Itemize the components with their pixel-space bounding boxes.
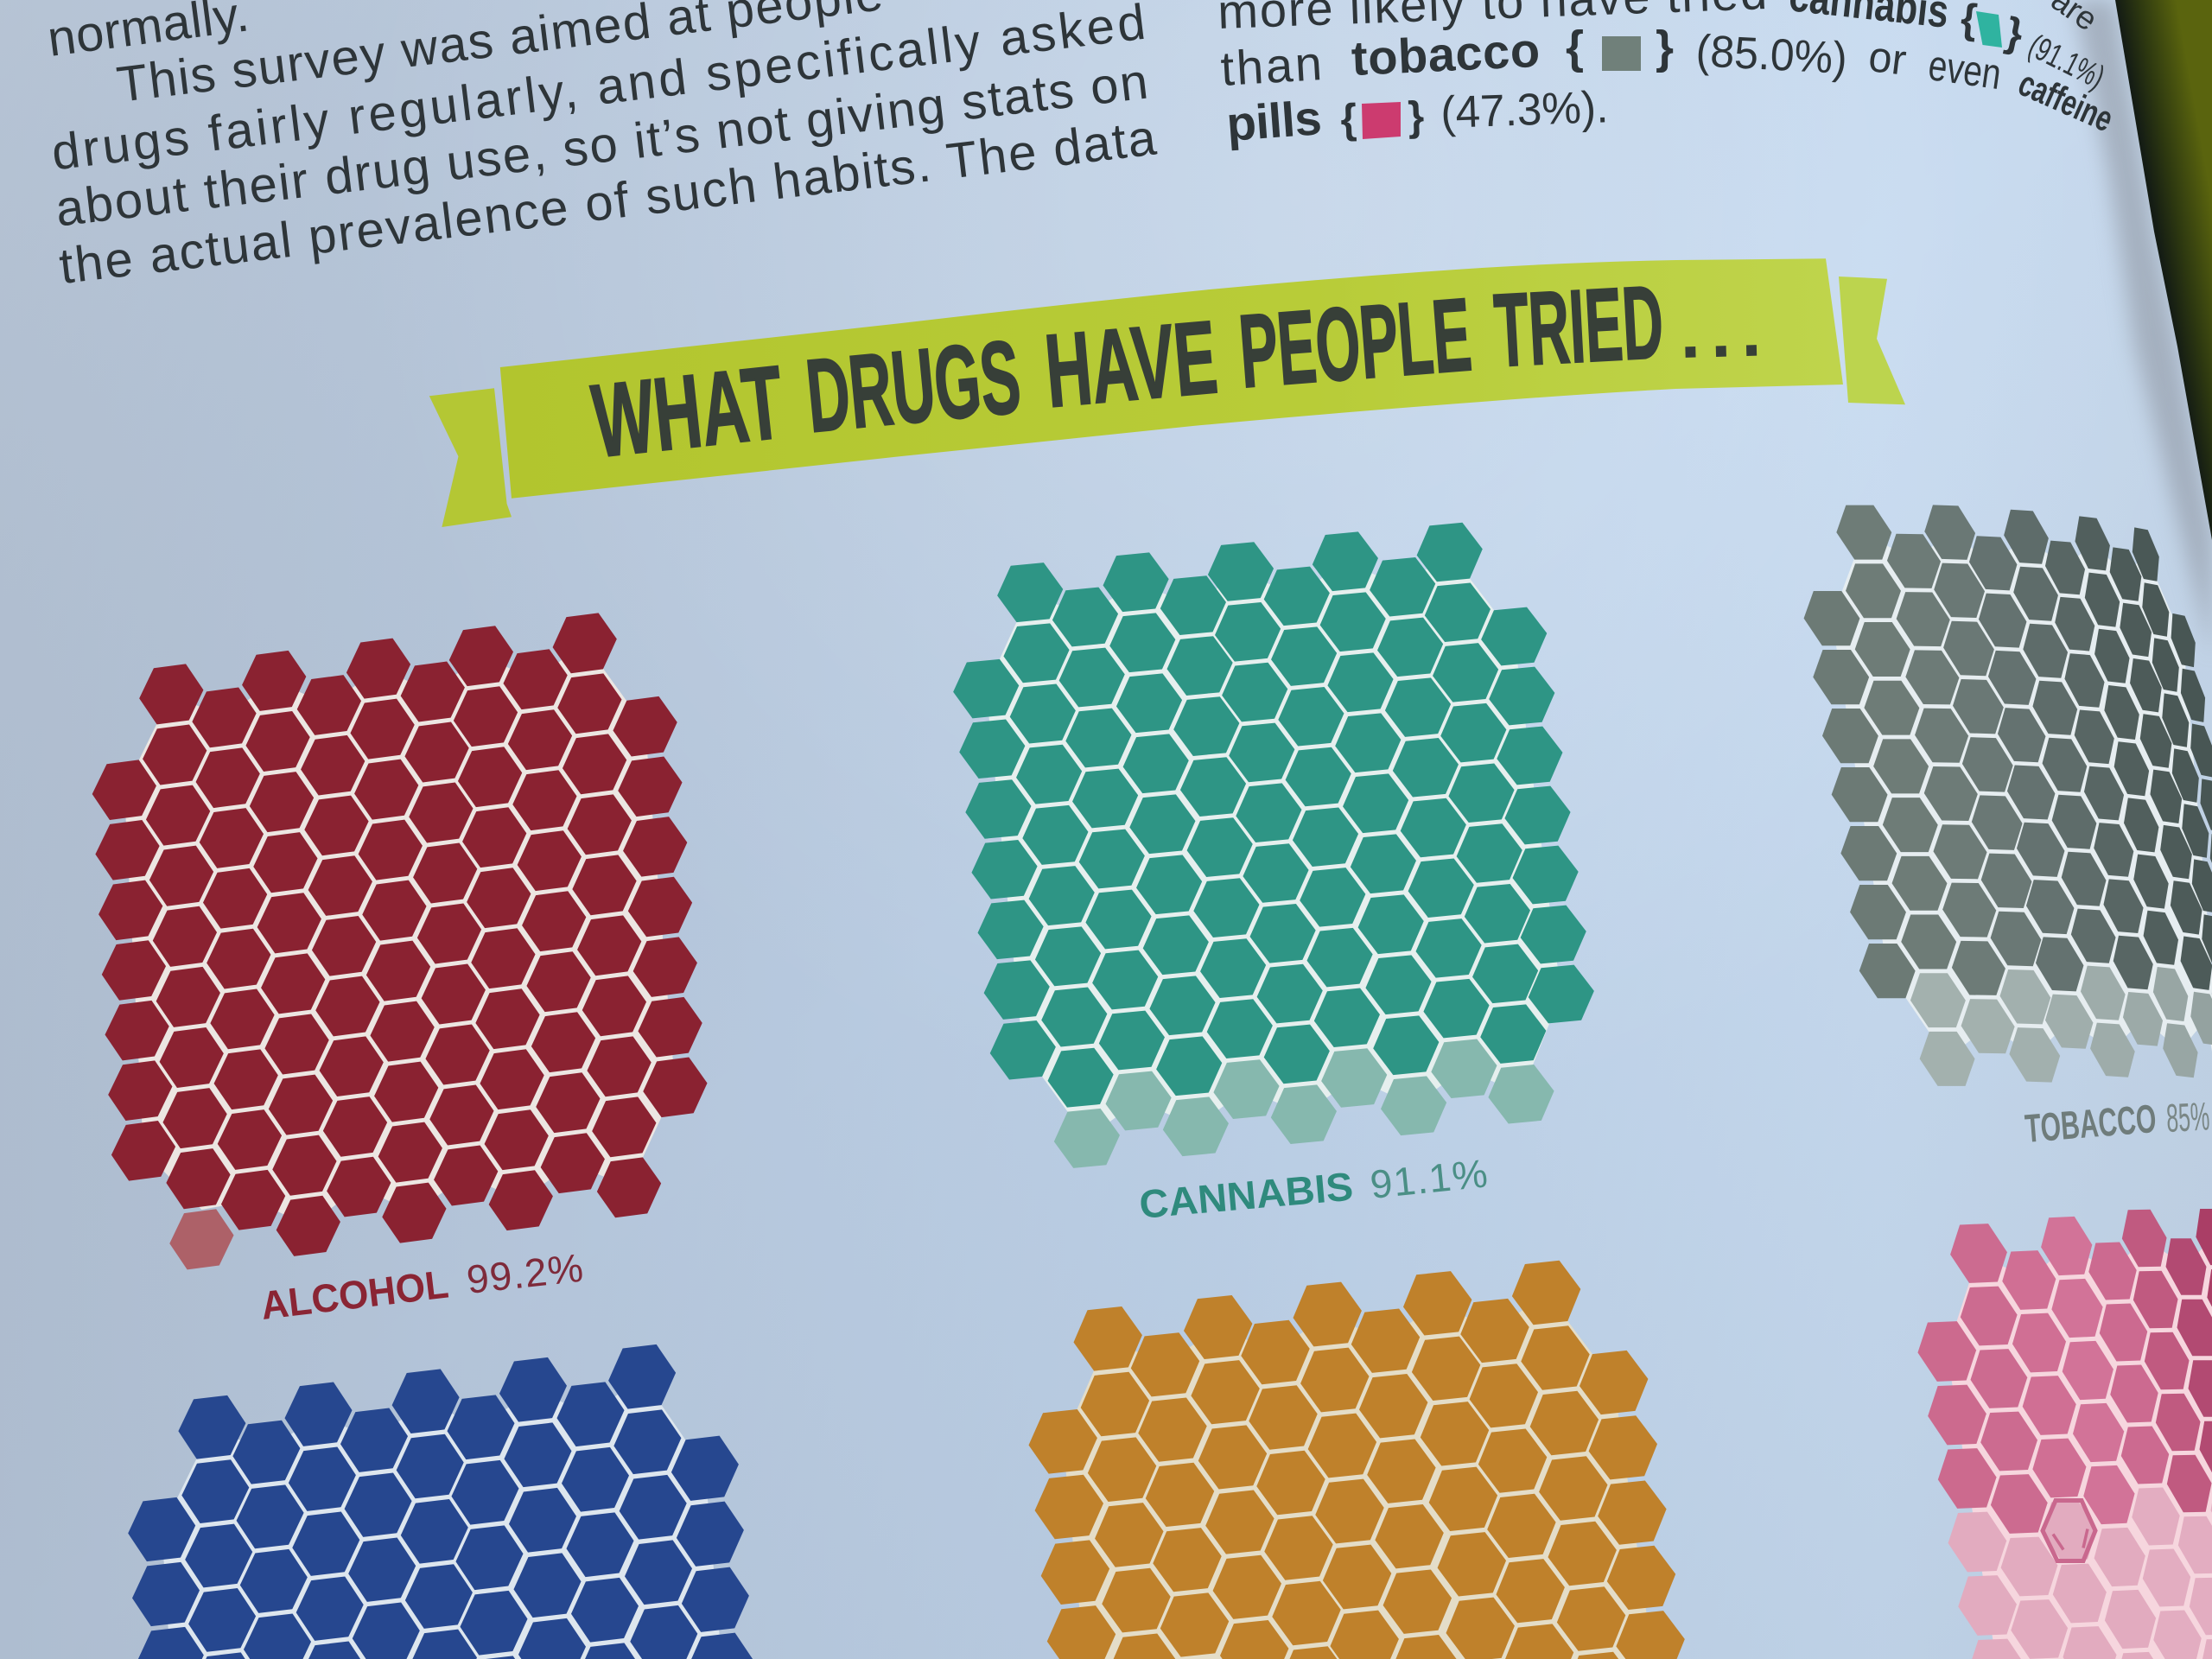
page edge shadow and book cover	[2074, 0, 2212, 657]
text block: right column findings: even	[1925, 41, 2004, 99]
label: alcohol	[258, 1245, 585, 1328]
text block: right column findings: or	[1866, 32, 1909, 85]
text block: right column findings: {	[1340, 96, 1357, 143]
hex chart: tobacco 85%	[1800, 505, 2212, 1086]
text block: right column findings: (85.0%)	[1694, 26, 1848, 84]
panel: tobacco	[1800, 505, 2212, 1151]
text block: left column intro: the actual prevalence of such habits. The data	[56, 109, 1160, 295]
banner title: DRUGS	[802, 319, 1025, 454]
banner ribbon	[500, 258, 1843, 499]
panel: orange drug chart	[1026, 1259, 1689, 1659]
banner title: ...	[1679, 290, 1762, 373]
label: alcohol: ALCOHOL	[258, 1261, 451, 1328]
label: cannabis	[1137, 1150, 1490, 1227]
text block: right column findings: pills	[1224, 90, 1324, 151]
panel: caffeine pills	[1913, 1209, 2212, 1659]
text block: right column findings	[1217, 0, 2120, 151]
hex chart: cannabis 91.1%	[950, 521, 1598, 1170]
text block: right column findings: caffeine	[2012, 62, 2120, 139]
banner title: WHAT	[588, 344, 789, 480]
banner left tail	[429, 388, 512, 527]
text block: left column intro	[44, 0, 1160, 295]
banner: what drugs have people tried	[429, 258, 1905, 527]
text block: right column findings: }	[1408, 93, 1425, 140]
banner title	[588, 264, 1762, 480]
label: cannabis: CANNABIS	[1137, 1164, 1355, 1227]
text block: right column findings: }	[2002, 10, 2027, 58]
panel: cannabis	[950, 521, 1598, 1227]
hex chart: orange	[1026, 1259, 1689, 1659]
panel: blue drug chart	[126, 1343, 757, 1659]
text block: right column findings: (91.1%)	[2023, 28, 2110, 96]
label: alcohol: 99.2%	[464, 1245, 585, 1302]
banner right tail	[1839, 276, 1905, 404]
text block: right column findings: tobacco	[1351, 22, 1541, 86]
label: cannabis: 91.1%	[1368, 1150, 1490, 1207]
banner title: HAVE	[1041, 299, 1222, 429]
banner title: PEOPLE	[1236, 276, 1475, 410]
text block: right column findings: {	[1566, 22, 1584, 73]
text block: left column intro: about their drug use, so it’s not giving stats on	[53, 54, 1151, 238]
text block: right column findings: }	[1656, 22, 1674, 73]
banner title: TRIED	[1491, 264, 1666, 389]
hex chart: caffeine pills 47.3%	[1913, 1209, 2212, 1659]
icon: benzene ring hexagon	[2043, 1500, 2095, 1560]
hex chart: blue	[126, 1343, 757, 1659]
text block: right column findings: than	[1219, 35, 1324, 96]
text block: right column findings: (47.3%).	[1440, 82, 1609, 138]
panel: alcohol	[91, 611, 709, 1328]
hex chart: alcohol 99.2%	[91, 611, 709, 1272]
